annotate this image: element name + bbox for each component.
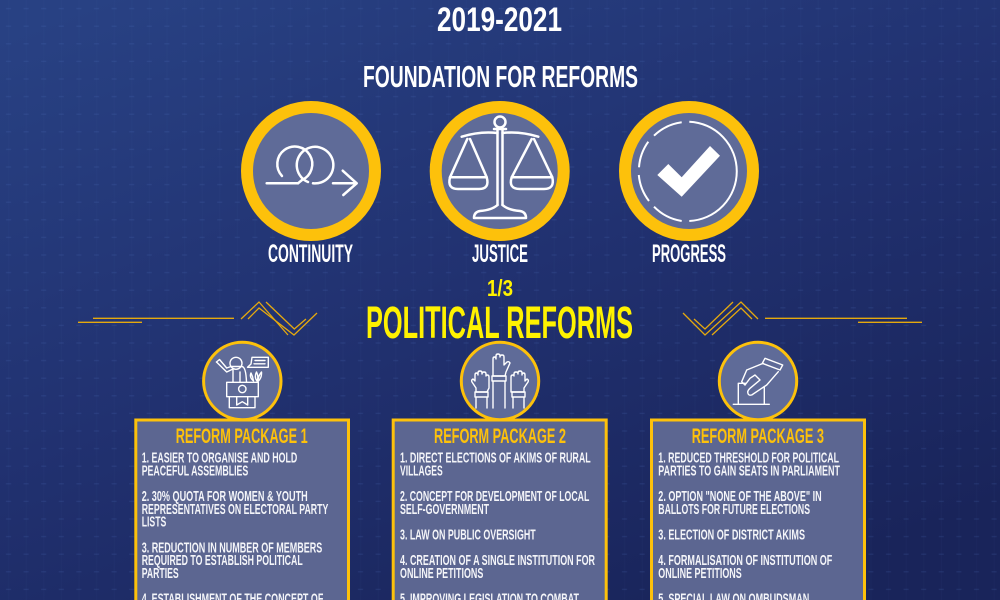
reform list: REQUIRED TO ESTABLISH POLITICAL xyxy=(142,552,303,569)
reform list: PEACEFUL ASSEMBLIES xyxy=(142,462,248,480)
icon badge: speaker at podium xyxy=(204,342,281,420)
icon badge: ballot box xyxy=(719,342,797,420)
badge: progress xyxy=(625,107,753,268)
badge: continuity xyxy=(247,107,375,268)
reform list: 3. REDUCTION IN NUMBER OF MEMBERS xyxy=(142,539,322,556)
icon: left hand xyxy=(472,371,489,408)
heading: foundation for reforms: FOUNDATION FOR REFORMS xyxy=(363,59,638,94)
reform list: 4. FORMALISATION OF INSTITUTION OF xyxy=(658,552,832,569)
reform list: ONLINE PETITIONS xyxy=(658,565,742,582)
reform list: REPRESENTATIVES ON ELECTORAL PARTY xyxy=(142,501,328,518)
reform list: PARTIES TO GAIN SEATS IN PARLIAMENT xyxy=(658,462,840,480)
reform list: 1. EASIER TO ORGANISE AND HOLD xyxy=(142,450,297,467)
ornament: left lines and zigzag xyxy=(78,302,317,335)
title: years: 2019-2021 xyxy=(437,1,562,39)
panel: reform package 3 xyxy=(652,420,864,600)
badge: justice xyxy=(436,107,564,268)
label: justice: JUSTICE xyxy=(472,240,528,268)
panel: reform package 2 xyxy=(393,420,606,600)
reform list xyxy=(658,450,840,600)
panel heading: REFORM PACKAGE 1 xyxy=(176,425,308,448)
panel: reform package 1 xyxy=(136,420,348,600)
reform list: 2. OPTION "NONE OF THE ABOVE" IN xyxy=(658,488,822,505)
reform list: 1. DIRECT ELECTIONS OF AKIMS OF RURAL xyxy=(400,450,591,467)
reform list: SELF-GOVERNMENT xyxy=(400,501,489,518)
icon badge: raised hands xyxy=(461,342,539,420)
panel heading: REFORM PACKAGE 3 xyxy=(692,425,824,448)
reform list xyxy=(142,450,328,600)
icon: scales xyxy=(449,116,553,218)
label: continuity: CONTINUITY xyxy=(268,240,353,268)
panel heading: REFORM PACKAGE 2 xyxy=(434,425,566,448)
reform list: BALLOTS FOR FUTURE ELECTIONS xyxy=(658,501,810,518)
reform list: 1. REDUCED THRESHOLD FOR POLITICAL xyxy=(658,450,839,467)
icon: check in dashed ring xyxy=(639,122,737,221)
reform list: 2. CONCEPT FOR DEVELOPMENT OF LOCAL xyxy=(400,488,589,505)
reform list: 2. 30% QUOTA FOR WOMEN & YOUTH xyxy=(142,488,308,505)
reform list: VILLAGES xyxy=(400,462,443,480)
label: progress: PROGRESS xyxy=(652,240,726,268)
reform list xyxy=(400,450,595,600)
reform list: PARTIES xyxy=(142,565,179,582)
icon: right hand xyxy=(511,371,528,408)
heading: political reforms: POLITICAL REFORMS xyxy=(366,297,633,348)
counter: 1/3: 1/3 xyxy=(487,275,513,301)
reform list: LISTS xyxy=(142,514,166,531)
ornament: right lines and zigzag xyxy=(683,302,922,335)
icon: loops and arrow xyxy=(267,147,357,195)
reform list: ONLINE PETITIONS xyxy=(400,565,483,582)
reform list: 4. CREATION OF A SINGLE INSTITUTION FOR xyxy=(400,552,595,569)
reform list: 3. LAW ON PUBLIC OVERSIGHT xyxy=(400,526,536,544)
icon: middle hand xyxy=(492,354,510,408)
reform list: 3. ELECTION OF DISTRICT AKIMS xyxy=(658,526,805,544)
